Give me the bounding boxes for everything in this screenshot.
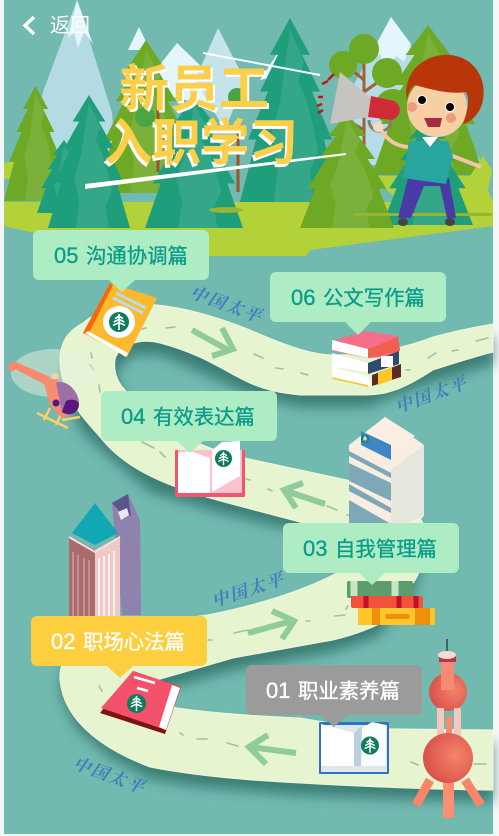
open book 04 (175, 441, 245, 497)
bubble 05: 05 (54, 243, 78, 268)
round trees (135, 34, 411, 192)
megaphone (317, 72, 400, 131)
bubble 03: 自我管理篇 (335, 538, 437, 561)
bubble 02 (31, 616, 207, 678)
bubble 02: 02 (51, 629, 75, 654)
book 05 (83, 283, 157, 357)
bubble 02: 职场心法篇 (83, 631, 185, 654)
header forest scene (4, 0, 493, 256)
winding road (60, 305, 493, 802)
bubble 06: 06 (291, 285, 315, 310)
bubble 03 (283, 523, 459, 585)
brand text 4: 中国太平 (71, 754, 149, 798)
front trees (37, 95, 492, 228)
brand text 1: 中国太平 (188, 283, 266, 327)
bubble 04: 04 (121, 404, 145, 429)
oriental pearl tower (416, 639, 481, 818)
bubble 05 (33, 230, 209, 292)
title decorative lines (85, 52, 346, 189)
brand text 2: 中国太平 (393, 373, 472, 417)
title: 新员工 (119, 61, 269, 117)
title: 新员工 (121, 63, 271, 119)
bubble 01: 职业素养篇 (298, 680, 400, 703)
book 02 (100, 671, 181, 734)
open book 01 (319, 722, 389, 774)
stacked books 03 (347, 581, 435, 625)
left ground patch (4, 160, 30, 180)
title (102, 61, 298, 174)
bubble 05: 沟通协调篇 (86, 245, 188, 268)
bubble 01: 01 (266, 678, 290, 703)
arrow right 1 (192, 328, 233, 356)
bubble 06: 公文写作篇 (323, 287, 425, 310)
arrow right 2 (248, 611, 294, 639)
road dashes (90, 327, 488, 765)
bubble 04 (101, 391, 277, 453)
back button: 返回 (50, 14, 90, 37)
boy character (373, 55, 484, 226)
back button (25, 14, 90, 37)
book stack 06 (332, 331, 401, 386)
back trees (4, 18, 484, 202)
bubble 04: 有效表达篇 (153, 406, 255, 429)
mountains (20, 0, 483, 180)
brand text 3: 中国太平 (209, 569, 288, 611)
helicopter (8, 349, 95, 428)
arrow left 2 (249, 735, 296, 764)
ground (4, 156, 493, 256)
bubble 01 (246, 665, 422, 727)
building (349, 417, 424, 530)
bubble 06 (270, 272, 446, 335)
bubble 03: 03 (303, 536, 327, 561)
title: 入职学习 (102, 118, 296, 174)
title: 入职学习 (104, 115, 298, 171)
arrow left 1 (284, 483, 325, 508)
skyscrapers (69, 494, 141, 616)
